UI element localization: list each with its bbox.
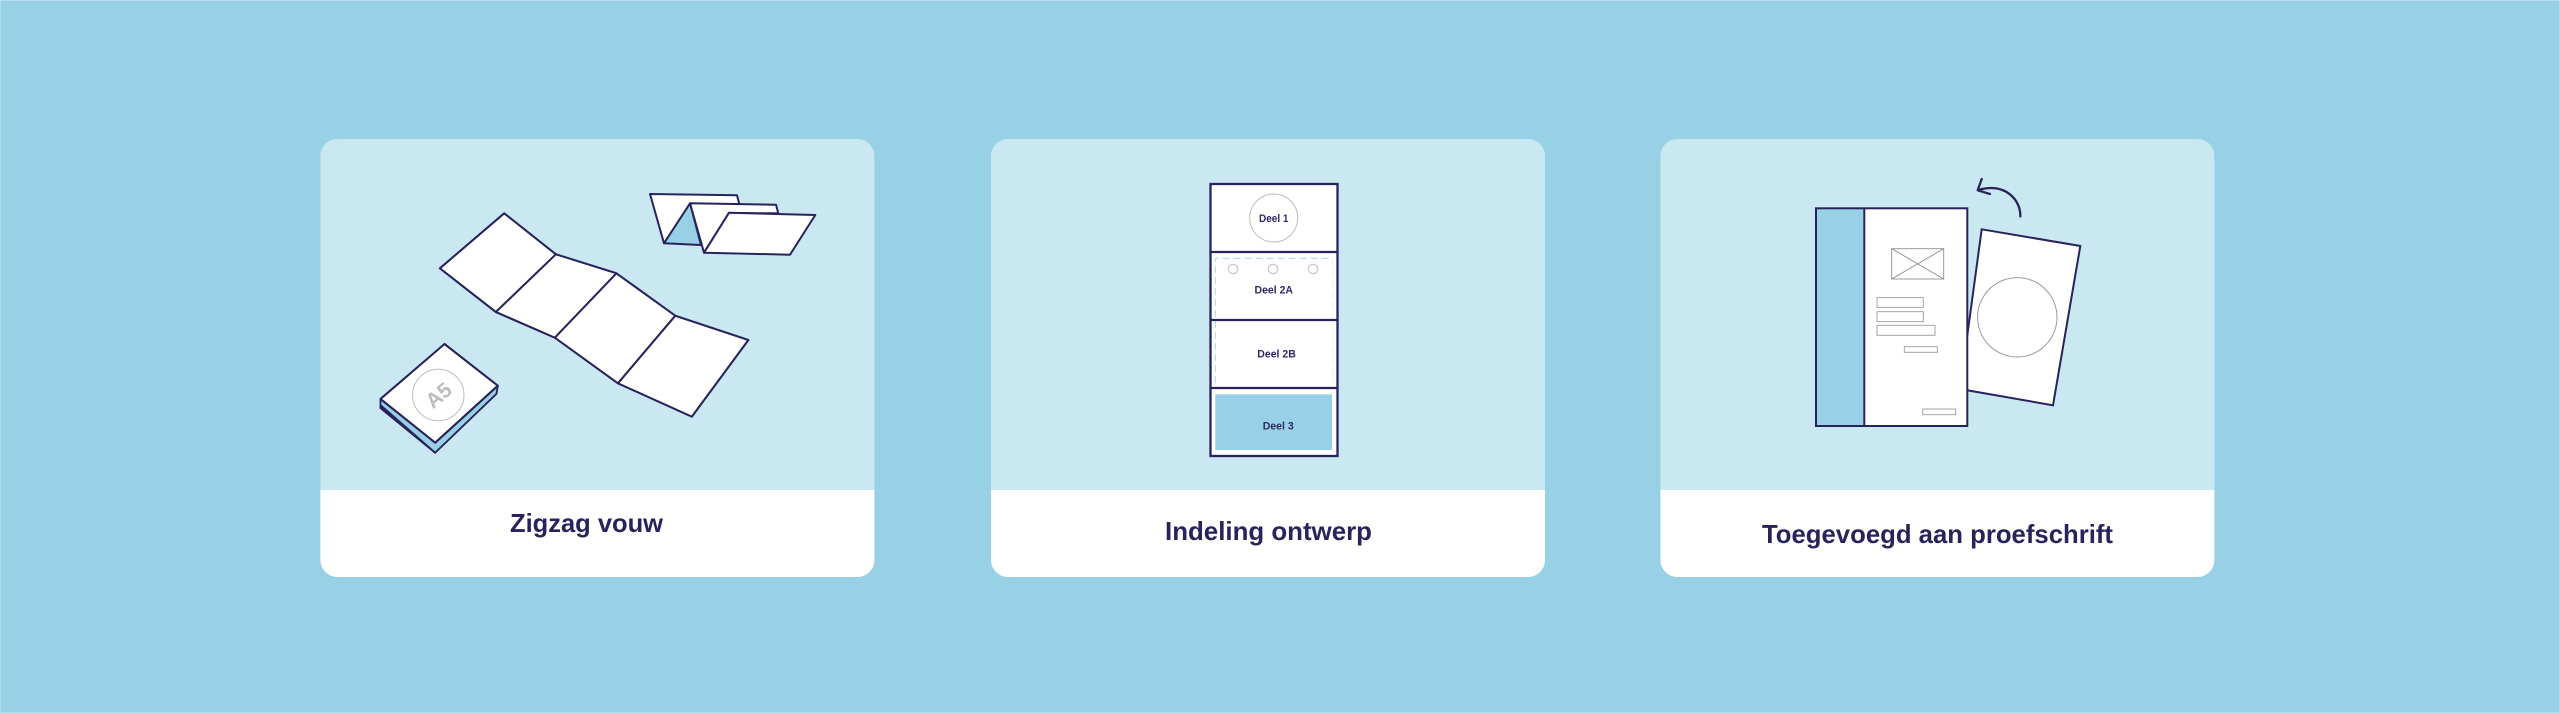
section labels: Deel 3 — [1263, 420, 1294, 432]
section: Deel 3 fill — [1215, 394, 1332, 450]
card footer — [1660, 490, 2214, 577]
illustration: folded A5 booklet: A5 — [421, 378, 457, 413]
panel: Zigzag vouw — [320, 139, 874, 577]
text placeholders — [1877, 298, 1956, 415]
section labels — [1254, 213, 1296, 432]
illustration: folded fan — [650, 194, 815, 255]
outlines — [1210, 184, 1338, 456]
image placeholder — [1892, 249, 1944, 279]
section circle: Deel 1 — [1250, 194, 1298, 242]
illustration: loose insert page — [1960, 229, 2080, 405]
punch holes — [1228, 264, 1318, 274]
illustration: layout sheet — [1210, 184, 1338, 456]
panel: Toegevoegd aan proefschrift — [1660, 139, 2214, 577]
illustration: folded A5 booklet — [380, 344, 498, 453]
card body — [991, 139, 1545, 490]
illustration: unfolded zigzag sheet — [440, 213, 748, 417]
card footer — [320, 490, 874, 577]
card body — [320, 139, 874, 490]
panel: Indeling ontwerp — [991, 139, 1545, 577]
card footer — [991, 490, 1545, 577]
illustration: thesis book — [1816, 208, 1967, 426]
card title: Indeling ontwerp — [1165, 516, 1372, 546]
dashed safe area — [1215, 258, 1332, 383]
card body — [1660, 139, 2214, 490]
section labels: Deel 1 — [1259, 213, 1288, 225]
card title: Toegevoegd aan proefschrift — [1762, 519, 2113, 549]
section labels: Deel 2A — [1254, 284, 1293, 296]
card title: Zigzag vouw — [510, 508, 664, 538]
section labels: Deel 2B — [1257, 348, 1296, 360]
icon: rotate arrow — [1978, 179, 2020, 216]
